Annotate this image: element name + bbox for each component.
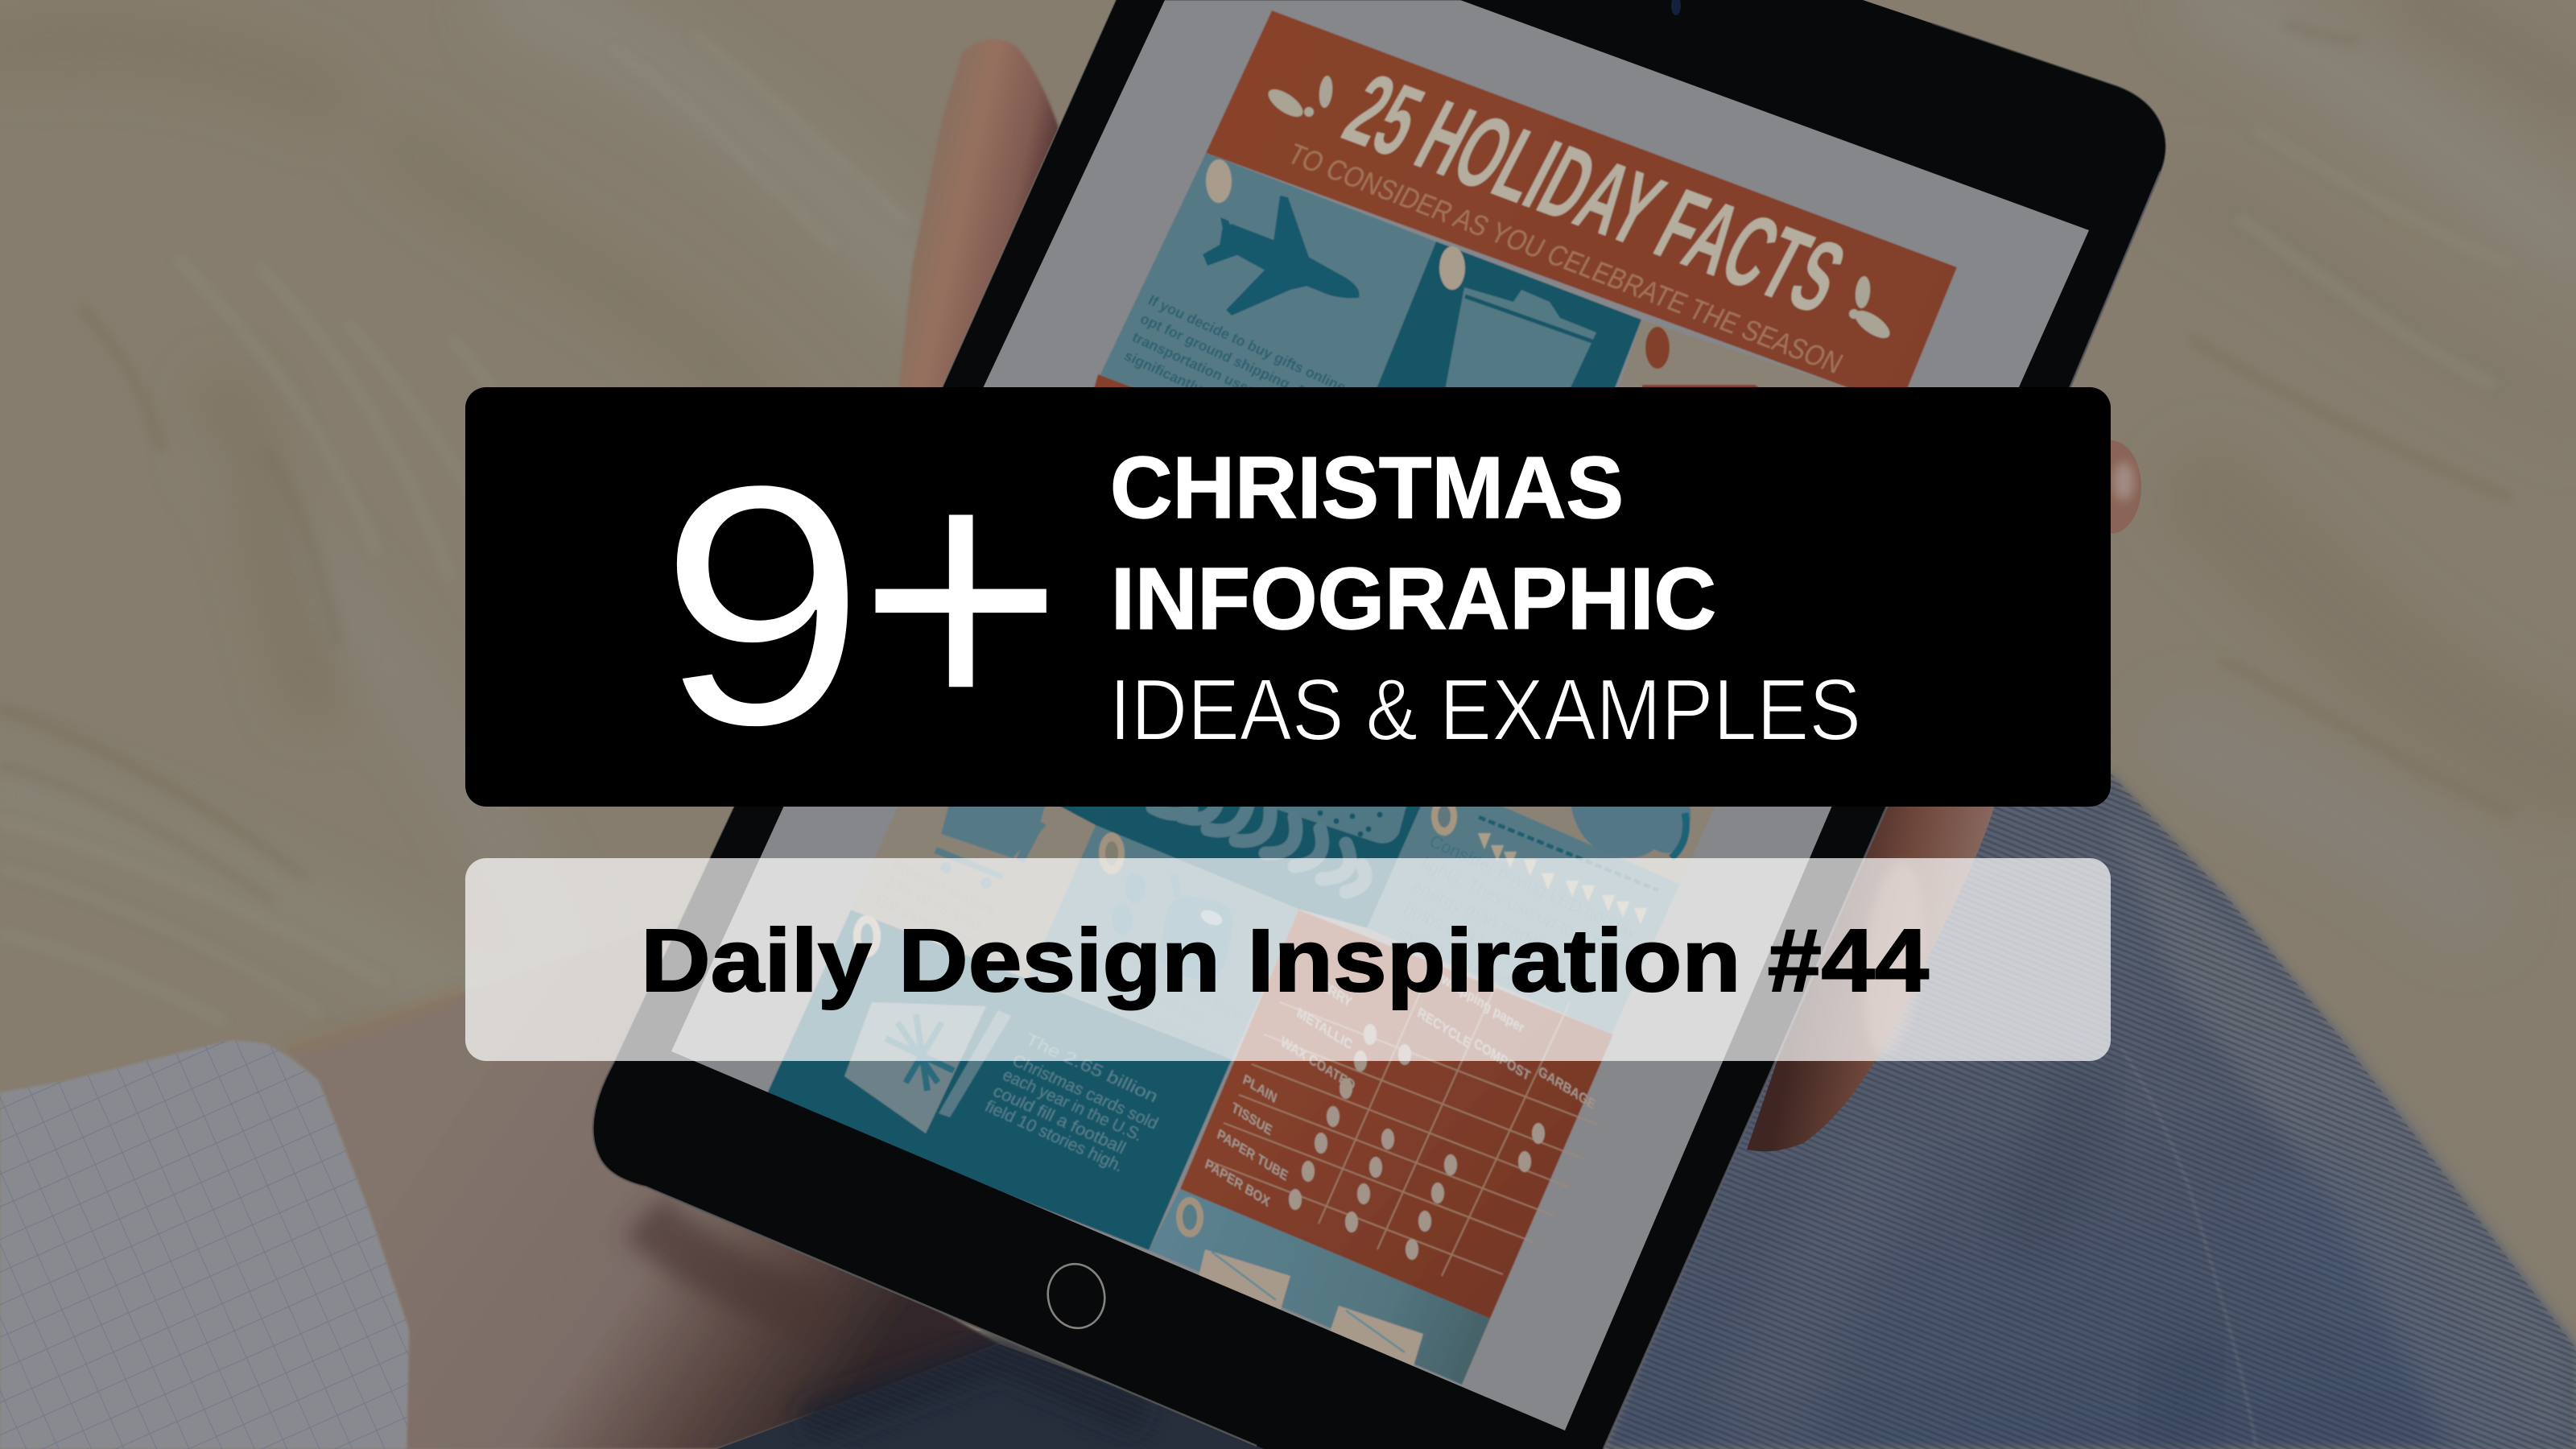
number badge (1176, 1197, 1203, 1237)
icon: cart (934, 801, 1046, 889)
table column labels: GARBAGE (1537, 1063, 1597, 1113)
table row labels: BERRY (1311, 972, 1353, 1010)
number badge (1099, 832, 1125, 874)
water text (1133, 967, 1245, 1059)
number badge (1206, 159, 1232, 203)
water text: on your gallons (1133, 1004, 1229, 1059)
panel: header banner (1206, 10, 1957, 407)
jeans (717, 773, 2576, 1449)
table row labels: WAX COATED (1279, 1034, 1357, 1094)
icon: envelope one (1198, 1249, 1290, 1320)
number badge (1431, 797, 1457, 836)
table grid (1211, 982, 1598, 1276)
number badge (853, 915, 881, 957)
cart text: 40% of its food (881, 873, 985, 934)
lights text: Consider buying LED holiday (1426, 831, 1641, 943)
panel: cookies tray (1042, 797, 1433, 928)
water text: some time (1141, 985, 1209, 1027)
panel: envelopes (1149, 1189, 1490, 1385)
panel: LED lights (1367, 797, 1680, 1034)
panel: subtitle box (465, 858, 2111, 1061)
heading: ideas and examples: IDEAS & EXAMPLES (1109, 661, 1861, 759)
tablet screen with infographic (644, 0, 2133, 1449)
icon: cookies (1153, 803, 1365, 892)
cart text: Eat those leftovers (873, 891, 1001, 963)
plane text (1121, 292, 1348, 425)
heading: infographic: INFOGRAPHIC (1111, 550, 1716, 648)
water text: You could save (1150, 967, 1245, 1022)
plane text: opt for ground shipping. Air (1137, 311, 1318, 403)
forearm (287, 902, 1000, 1449)
panel: title box (465, 387, 2111, 807)
plane text: If you decide to buy gifts online (1146, 292, 1348, 395)
icon: trash bin (1444, 287, 1596, 394)
tablet body (592, 0, 2165, 1449)
number badge (1645, 327, 1670, 369)
table row labels: PAPER TUBE (1216, 1126, 1290, 1184)
panel 1: plane (1093, 153, 1436, 387)
icon: bulb (1155, 873, 1237, 985)
big number 9: 9 (658, 415, 866, 797)
table snowflake markers (1289, 1024, 1545, 1260)
icon: plane (1203, 196, 1360, 316)
cart text: America wastes (889, 856, 999, 919)
card fact text: could fill a football (990, 1082, 1129, 1158)
panel: water and bulb (1028, 825, 1300, 1059)
icon: string of lights (1479, 817, 1658, 890)
heading: christmas: CHRISTMAS (1110, 439, 1624, 537)
card fact text (982, 1030, 1161, 1176)
icon: water drops (1112, 873, 1146, 935)
left thumb behind tablet (899, 39, 1071, 402)
infographic title: 25 HOLIDAY FACTS (1328, 52, 1862, 335)
tablet camera (1671, 0, 1681, 15)
panel 2: trash bin (1374, 242, 1641, 394)
table column labels: COMPOST (1472, 1035, 1532, 1084)
panel: shopping cart (851, 797, 1096, 978)
plane text: significantly more fuel (1121, 348, 1267, 425)
number badge (1439, 246, 1465, 290)
table column labels (1416, 971, 1597, 1113)
home button (1042, 1259, 1111, 1333)
icon: baking tray (1240, 797, 1409, 844)
card fact text: field 10 stories high. (982, 1097, 1126, 1176)
panel: Christmas card (765, 910, 1232, 1250)
table row labels: METALLIC (1295, 1005, 1354, 1053)
lights text: lights. They use up to 80% less (1418, 853, 1648, 972)
table column labels: wrapping paper (1439, 971, 1526, 1036)
lights text: energy than traditional (1409, 876, 1575, 966)
icon: holly right (1848, 275, 1890, 339)
lights text (1393, 831, 1648, 1003)
subtitle text: Daily Design Inspiration #44 (641, 911, 1929, 1010)
lights text: bulbs and last much longer (1401, 898, 1600, 1003)
icon: card (844, 1002, 986, 1133)
plus sign: + (857, 398, 1065, 795)
shirt sleeve with check pattern (0, 1040, 409, 1449)
panel 3: beige (1612, 320, 1904, 407)
card fact text: The 2.65 billion (1022, 1030, 1161, 1106)
infographic subtitle: TO CONSIDER AS YOU CELEBRATE THE SEASON (1282, 138, 1848, 380)
icon: holly left (1267, 75, 1333, 118)
table row labels: TISSUE (1230, 1100, 1274, 1139)
panel: recycling table (1180, 910, 1613, 1319)
plane text: transportation uses (1129, 329, 1258, 398)
lights text: saving money each (1393, 921, 1539, 1001)
card fact text: Christmas cards sold (1009, 1051, 1161, 1133)
table row labels: PLAIN (1241, 1071, 1278, 1106)
panel: beige with cloud (1481, 797, 1719, 884)
table row labels (1203, 972, 1357, 1210)
icon: envelope two (1328, 1306, 1423, 1377)
icon: cloud (1570, 797, 1690, 858)
icon: snowflake (886, 1014, 954, 1091)
cart text (873, 856, 1001, 963)
card fact text: each year in the U.S. (1000, 1066, 1146, 1145)
right hand fingers (1747, 440, 2141, 1151)
table row labels: PAPER BOX (1203, 1156, 1271, 1210)
table column labels: RECYCLE (1416, 1005, 1472, 1052)
